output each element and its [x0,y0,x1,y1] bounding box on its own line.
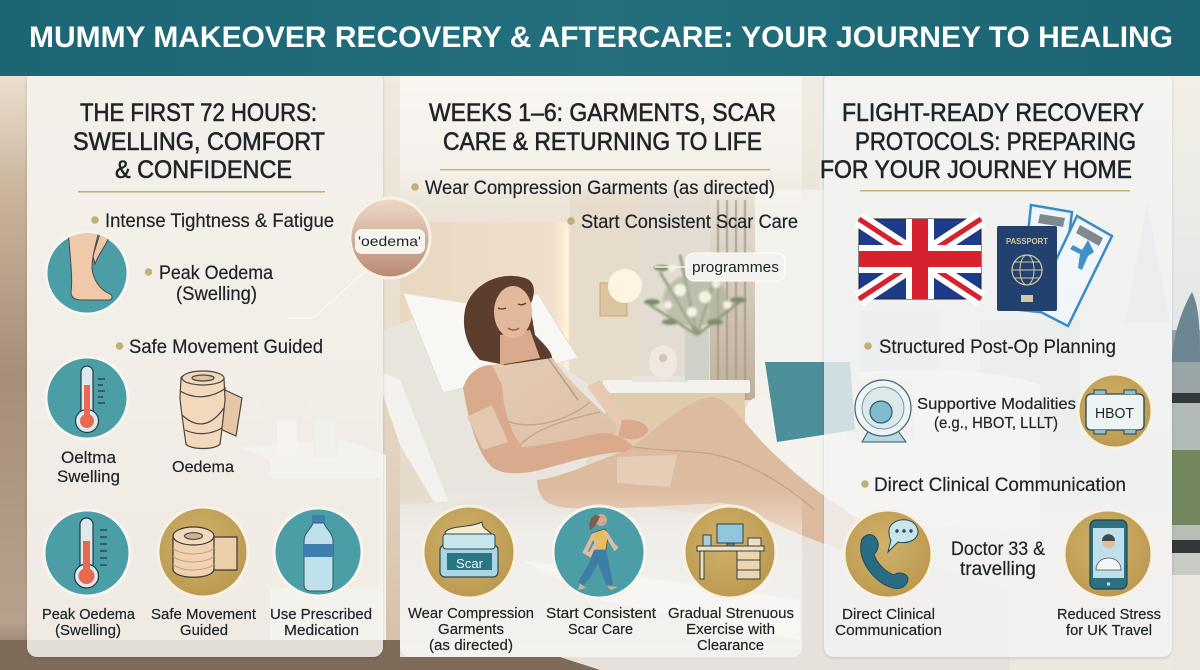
callout: oedema magnifier [288,198,430,318]
wall lamp [600,269,642,316]
column: flight-ready [820,99,1161,639]
label: Oedema: Oedema [172,459,234,476]
bullet: safe movement: Safe Movement Guided [129,337,323,358]
icon: water bottle [274,508,362,596]
caption: Use Prescribed Medication [270,606,372,639]
caption: wear compression garments: Garments [438,621,504,638]
caption: Peak Oedema: (Swelling) [55,622,121,639]
label: programmes [655,253,785,281]
caption: Use Prescribed Medication: Use Prescribed [270,606,372,623]
icon: phone with speech bubble [844,510,932,598]
icon: desk [684,506,776,598]
heading: PROTOCOLS: PREPARING [855,128,1136,156]
woman in compression garments [463,276,860,552]
bullet: clinical communication: Direct Clinical Communication [874,475,1126,496]
bullet: tightness: Intense Tightness & Fatigue [105,211,334,232]
bullet: peak oedema: Peak Oedema [159,263,273,284]
heading: SWELLING, COMFORT [73,128,325,156]
icon: bandage [180,371,242,448]
caption: wear compression garments [408,605,534,654]
reclining bed [383,300,1010,670]
caption: gradual exercise: Gradual Strenuous [668,605,794,622]
heading [73,99,325,193]
callout: oedema magnifier: 'oedema' [358,233,421,249]
icon: HBOT chamber [1078,374,1152,448]
icon: thermometer small card [44,510,130,596]
heading: THE FIRST 72 HOURS: [80,99,317,127]
caption: direct clinical [835,606,942,639]
icon: UK flag [859,219,981,299]
icon: bandage roll [158,507,248,597]
caption: wear compression garments: (as directed) [429,637,513,654]
caption: direct clinical: Communication [835,622,942,639]
caption: start consistent scar care: Scar Care [568,621,633,638]
caption: reduced stress [1057,606,1161,639]
caption: Safe Movement: Guided [180,622,228,639]
caption: gradual exercise: Exercise with [686,621,775,638]
label: Oeltma Swelling: Oeltma [61,448,117,467]
icon: thermometer [46,357,128,439]
heading: FLIGHT-READY RECOVERY [842,99,1144,127]
label: programmes: programmes [692,259,779,276]
text: doctor 33 and travelling [951,539,1045,580]
icon: passport and tickets: PASSPORT [1006,237,1048,246]
bullet: structured planning: Structured Post-Op Planning [879,337,1116,358]
caption: Peak Oedema [42,606,136,639]
title: MUMMY MAKEOVER RECOVERY & AFTERCARE: YOUR JOURNEY TO HEALING [29,21,1173,54]
panel: left translucent card [27,72,383,657]
panel: right translucent card [824,72,1172,657]
heading: WEEKS 1–6: GARMENTS, SCAR [429,99,776,127]
panel: middle bottom translucent card [400,490,802,657]
nightstand under left panel [240,389,386,640]
label: Oeltma Swelling [57,448,120,486]
heading [820,99,1144,192]
bullet: scar care: Start Consistent Scar Care [581,212,798,233]
icon: doctor on phone [1064,510,1152,598]
column: first 72 hours [42,99,372,639]
caption: Safe Movement [151,606,257,639]
side table with vase and flowers [603,255,750,447]
icon: HBOT chamber: HBOT [1095,405,1134,422]
icon: passport and tickets [997,205,1112,326]
text: supportive modalities [917,396,1076,432]
heading [429,99,776,170]
bullet: compression garments: Wear Compression Garments (as directed) [425,178,775,199]
caption: reduced stress: Reduced Stress [1057,606,1161,623]
header banner [0,0,1200,76]
icon: scar cream jar: Scar [456,556,484,571]
icon: scar cream jar [423,506,515,598]
bullet: peak oedema [145,263,273,305]
text: doctor 33 and travelling: travelling [960,559,1036,580]
column: weeks 1-6 [408,99,798,654]
caption: start consistent scar care: Start Consistent [546,605,657,622]
bullet: peak oedema: (Swelling) [176,284,257,305]
icon: foot [46,230,128,314]
icon: walking woman [553,506,645,598]
label: Oeltma Swelling: Swelling [57,467,120,486]
pillow [403,293,578,393]
text: supportive modalities: (e.g., HBOT, LLLT) [934,415,1058,432]
caption: direct clinical: Direct Clinical [842,606,935,623]
headboard [400,222,569,412]
caption: reduced stress: for UK Travel [1066,622,1152,639]
text: supportive modalities: Supportive Modalities [917,396,1076,413]
window and city view [820,76,1200,670]
panel: middle top translucent card [400,76,802,206]
curtains [570,190,824,400]
text: doctor 33 and travelling: Doctor 33 & [951,539,1045,560]
caption: wear compression garments: Wear Compression [408,605,534,622]
heading: CARE & RETURNING TO LIFE [443,128,762,156]
caption: Use Prescribed Medication: Medication [284,622,359,639]
heading: FOR YOUR JOURNEY HOME [820,156,1132,184]
caption: start consistent scar care [546,605,657,638]
caption: Safe Movement: Safe Movement [151,606,257,623]
sofa and teal cushion [745,362,1040,530]
heading: & CONFIDENCE [115,156,292,184]
icon: light therapy machine [855,380,911,442]
caption: gradual exercise: Clearance [697,637,764,654]
caption: gradual exercise [668,605,794,654]
caption: Peak Oedema: Peak Oedema [42,606,136,623]
